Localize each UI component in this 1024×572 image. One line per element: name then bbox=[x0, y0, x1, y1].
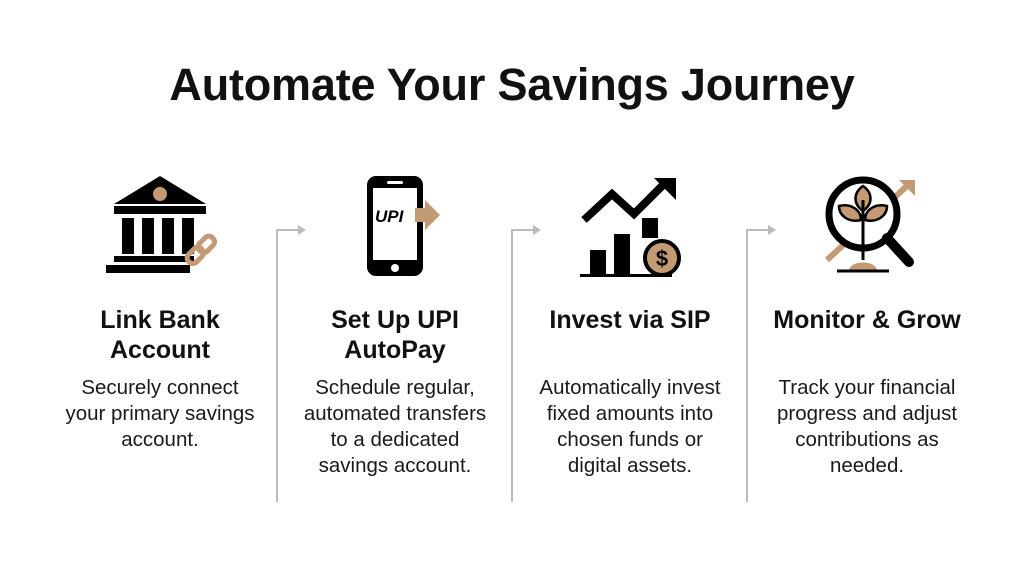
text bbox=[777, 376, 957, 477]
panel: link bank bbox=[65, 176, 255, 451]
heading: Invest via SIP bbox=[549, 306, 711, 334]
icon: phone UPI: UPI bbox=[375, 207, 405, 226]
icon: phone UPI bbox=[367, 176, 440, 276]
panel: SIP bbox=[539, 178, 721, 477]
text: contributions as bbox=[795, 428, 939, 451]
text bbox=[539, 376, 721, 477]
icon: bank bbox=[106, 176, 217, 273]
panel: monitor bbox=[773, 176, 961, 477]
arrow: divider 2 bbox=[511, 225, 541, 502]
heading bbox=[100, 306, 220, 364]
text: fixed amounts into bbox=[547, 402, 713, 425]
heading: AutoPay bbox=[344, 336, 446, 364]
heading: Set Up UPI bbox=[331, 306, 459, 334]
text: chosen funds or bbox=[557, 428, 703, 451]
icon: growth chart bbox=[580, 178, 681, 277]
text: digital assets. bbox=[568, 454, 692, 477]
icon: growth chart: $ bbox=[656, 246, 668, 271]
text: your primary savings bbox=[65, 402, 255, 425]
heading bbox=[331, 306, 459, 364]
text: Schedule regular, bbox=[315, 376, 475, 399]
text: to a dedicated bbox=[331, 428, 459, 451]
text: Track your financial bbox=[778, 376, 955, 399]
text: progress and adjust bbox=[777, 402, 957, 425]
text bbox=[65, 376, 255, 451]
heading: Monitor & Grow bbox=[773, 306, 961, 334]
title: Automate Your Savings Journey bbox=[169, 59, 855, 110]
text: Automatically invest bbox=[539, 376, 721, 399]
text: Securely connect bbox=[81, 376, 239, 399]
text: account. bbox=[121, 428, 199, 451]
icon: magnifier plant bbox=[825, 176, 915, 272]
arrow: divider 1 bbox=[276, 225, 306, 502]
text: savings account. bbox=[319, 454, 471, 477]
heading: Link Bank bbox=[100, 306, 220, 334]
heading: Account bbox=[110, 336, 210, 364]
panel: UPI bbox=[304, 176, 486, 477]
text bbox=[304, 376, 486, 477]
text: automated transfers bbox=[304, 402, 486, 425]
arrow: divider 3 bbox=[746, 225, 776, 502]
text: needed. bbox=[830, 454, 904, 477]
